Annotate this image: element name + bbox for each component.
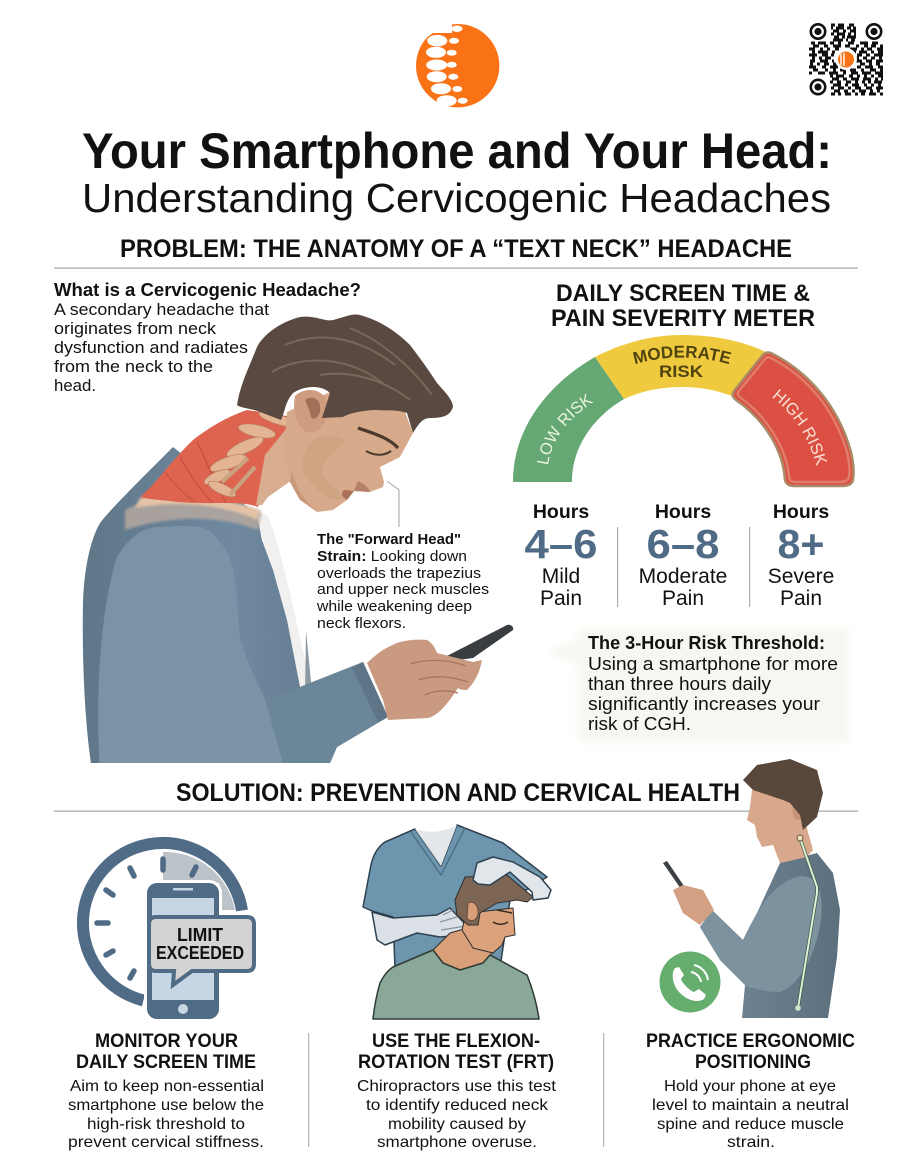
column: ergonomic positioning [646, 1031, 855, 1151]
callout: 3-hour risk threshold: risk of CGH. [588, 714, 691, 734]
icon: green phone call [660, 952, 720, 1012]
column: ergonomic positioning: spine and reduce muscle [657, 1116, 844, 1133]
patient face [462, 905, 515, 953]
stat: 6-8 hours moderate pain [639, 501, 727, 610]
stat: 8+ hours severe pain: Hours [773, 501, 829, 523]
text: what is a cervicogenic headache: head. [54, 377, 96, 395]
ear [294, 390, 328, 433]
patient neck [433, 925, 493, 970]
illustration: chiropractor flexion-rotation test [363, 825, 551, 1019]
gauge low risk [513, 357, 624, 482]
stat: 4-6 hours mild pain: Mild [542, 565, 580, 588]
column: flexion-rotation test: mobility caused by [388, 1116, 526, 1133]
callout: 3-hour risk threshold: The 3-Hour Risk Threshold: [588, 633, 825, 653]
callout: forward head strain: The "Forward Head" [317, 531, 461, 548]
stat: 4-6 hours mild pain: Hours [533, 501, 589, 523]
column: monitor screen time: DAILY SCREEN TIME [76, 1052, 256, 1073]
sweater [700, 853, 840, 1018]
column: flexion-rotation test: Chiropractors use this test [357, 1078, 557, 1095]
illustration: ergonomic posture [663, 759, 840, 1018]
callout: forward head strain [316, 481, 489, 632]
icon: clock and phone limit exceeded [83, 843, 254, 1019]
sweater upper arm [98, 526, 285, 770]
text: what is a cervicogenic headache: dysfunction and radiates [54, 339, 248, 357]
column: monitor screen time: high-risk threshold to [87, 1116, 245, 1133]
stat: 8+ hours severe pain: Severe [768, 565, 834, 588]
column: ergonomic positioning: Hold your phone at eye [664, 1078, 836, 1095]
icon: spine logo [416, 22, 499, 107]
gauge high risk [731, 351, 855, 488]
column: ergonomic positioning: PRACTICE ERGONOMIC [646, 1031, 855, 1052]
column: flexion-rotation test: ROTATION TEST (FRT) [358, 1052, 554, 1073]
heading: screen time meter [551, 280, 815, 332]
stat: 6-8 hours moderate pain: Moderate [639, 565, 727, 588]
heading: screen time meter: DAILY SCREEN TIME & [556, 280, 810, 307]
phone [663, 861, 684, 889]
gauge moderate risk: RISK [659, 362, 704, 381]
upper arm and gloved hand [473, 857, 551, 900]
column: monitor screen time: smartphone use below the [68, 1097, 264, 1114]
callout: forward head strain: Strain: Looking down [317, 548, 467, 565]
gauge high risk: HIGH RISK [772, 389, 828, 466]
text: what is a cervicogenic headache: from the neck to the [54, 358, 213, 376]
title: Your Smartphone and Your Head: [82, 123, 832, 179]
stat: 4-6 hours mild pain: Pain [540, 587, 582, 610]
callout: forward head strain: overloads the trapezius [317, 565, 481, 582]
spine line [798, 838, 817, 1008]
text: what is a cervicogenic headache: What is a Cervicogenic Headache? [54, 280, 361, 300]
heading: problem: PROBLEM: THE ANATOMY OF A “TEXT NECK” HEADACHE [120, 235, 792, 263]
scrubs [363, 825, 547, 968]
stat: 6-8 hours moderate pain: Hours [655, 501, 711, 523]
cervical spine [204, 412, 287, 498]
sweater body [83, 447, 388, 770]
hands [367, 640, 482, 720]
stat: 6-8 hours moderate pain: Pain [662, 587, 704, 610]
icon: clock and phone limit exceeded: LIMIT [177, 924, 224, 945]
text: what is a cervicogenic headache: originates from neck [54, 320, 217, 338]
neck and shoulder skin [124, 503, 263, 531]
callout: 3-hour risk threshold [545, 628, 849, 742]
callout: forward head strain: and upper neck muscles [317, 581, 489, 598]
column: monitor screen time [68, 1031, 264, 1151]
gauge moderate risk [595, 335, 766, 399]
callout: forward head strain: while weakening deep [316, 598, 472, 615]
callout: forward head strain: neck flexors. [317, 615, 406, 632]
title: Understanding Cervicogenic Headaches [82, 175, 831, 221]
neck muscles [140, 410, 300, 507]
text: what is a cervicogenic headache: A secondary headache that [54, 301, 269, 319]
gauge: risk meter [513, 335, 855, 488]
gauge moderate risk: MODERATE [633, 346, 732, 364]
icon: QR code [809, 24, 883, 94]
text: what is a cervicogenic headache [54, 280, 361, 395]
column: monitor screen time: MONITOR YOUR [95, 1031, 238, 1052]
illustration: man looking down at phone [83, 314, 513, 770]
callout: 3-hour risk threshold: significantly increases your [588, 694, 820, 714]
face [284, 392, 413, 512]
stat: 8+ hours severe pain: 8+ [778, 521, 824, 567]
lower arm and gloved hand [372, 908, 468, 945]
column: flexion-rotation test [357, 1031, 557, 1151]
hair [237, 314, 453, 433]
column: flexion-rotation test: to identify reduced neck [366, 1097, 549, 1114]
stat: 4-6 hours mild pain: 4–6 [524, 521, 598, 567]
hand [673, 885, 714, 925]
column: ergonomic positioning: level to maintain a neutral [652, 1097, 849, 1114]
callout: 3-hour risk threshold: than three hours daily [588, 674, 771, 694]
gauge low risk: LOW RISK [537, 393, 594, 464]
stat: 4-6 hours mild pain [524, 501, 598, 610]
title [82, 123, 832, 221]
sweater sleeve [265, 662, 388, 770]
column: ergonomic positioning: strain. [727, 1134, 775, 1151]
hair [743, 759, 823, 830]
stat: 8+ hours severe pain: Pain [780, 587, 822, 610]
icon: clock and phone limit exceeded: EXCEEDED [156, 942, 244, 963]
column: monitor screen time: Aim to keep non-essential [70, 1078, 264, 1095]
column: ergonomic positioning: POSITIONING [695, 1052, 811, 1073]
stat: 6-8 hours moderate pain: 6–8 [646, 521, 720, 567]
patient shirt [373, 950, 539, 1019]
column: monitor screen time: prevent cervical stiffness. [68, 1134, 264, 1151]
stat: 8+ hours severe pain [768, 501, 834, 610]
patient hair [455, 875, 533, 925]
column: flexion-rotation test: USE THE FLEXION- [372, 1031, 540, 1052]
callout: 3-hour risk threshold: Using a smartphone for more [588, 654, 838, 674]
white shirt [259, 514, 306, 687]
column: flexion-rotation test: smartphone overuse. [377, 1134, 537, 1151]
phone [443, 625, 513, 661]
heading: screen time meter: PAIN SEVERITY METER [551, 305, 815, 332]
neck and face [747, 790, 813, 863]
ear [792, 801, 803, 820]
heading: solution: SOLUTION: PREVENTION AND CERVICAL HEALTH [176, 779, 740, 807]
